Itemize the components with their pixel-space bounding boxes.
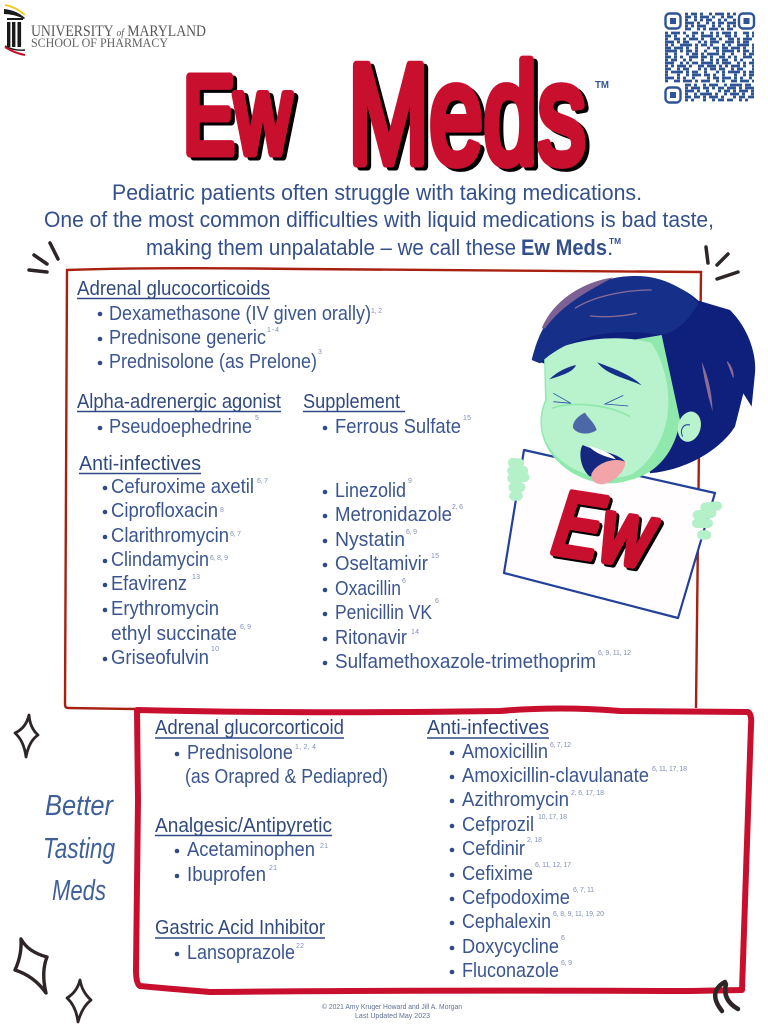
section: anti-infectives: 2, 18	[527, 837, 542, 844]
sign lettering: Ew: Ew	[550, 476, 666, 590]
QR code	[665, 14, 754, 102]
anti-infectives: left column: 6, 7	[257, 478, 268, 485]
section: adrenal glucorcorticoid: (as Orapred & Pediapred)	[185, 765, 388, 788]
icon: campus dome and columns	[4, 5, 25, 55]
anti-infectives: right column: Linezolid	[335, 479, 406, 502]
section: anti-infectives: Anti-infectives	[79, 452, 201, 475]
anti-infectives: left column: Ciprofloxacin	[111, 499, 218, 522]
section: anti-infectives: Azithromycin	[462, 788, 569, 811]
section: anti-infectives: Amoxicillin-clavulanate	[462, 764, 649, 787]
intro text	[44, 180, 714, 260]
section: adrenal glucocorticoids: Dexamethasone (IV given orally)	[109, 302, 371, 325]
section: anti-infectives	[79, 452, 631, 673]
anti-infectives: right column: 9	[408, 478, 412, 485]
anti-infectives: right column: Metronidazole	[335, 503, 452, 526]
section: gastric acid inhibitor: Lansoprazole	[187, 941, 295, 964]
label: Better Tasting Meds: Meds	[52, 875, 106, 907]
anti-infectives: left column: Cefuroxime axetil	[111, 475, 254, 498]
squeezed eyes	[553, 393, 628, 406]
icon: sparkle small	[67, 980, 91, 1022]
section: gastric acid inhibitor: Gastric Acid Inhibitor	[155, 916, 325, 939]
anti-infectives: left column	[103, 475, 268, 669]
section: gastric acid inhibitor	[155, 916, 325, 964]
icon: sparkle large	[15, 939, 47, 993]
section: adrenal glucorcorticoid: 1, 2, 4	[295, 744, 316, 751]
emphasis ticks: right	[706, 247, 738, 279]
anti-infectives: right column: 6	[435, 598, 439, 605]
anti-infectives: left column: 10	[211, 646, 219, 653]
section: anti-infectives: 6, 9	[561, 960, 572, 967]
mouth	[580, 445, 625, 477]
sign lettering: Ew: Ew	[547, 473, 664, 588]
section: analgesic/antipyretic: Acetaminophen	[187, 838, 315, 861]
sign card	[504, 450, 715, 618]
title lettering: Ew	[183, 54, 291, 177]
section: anti-infectives: Amoxicillin	[462, 740, 548, 763]
section: anti-infectives: 6, 8, 9, 11, 19, 20	[553, 911, 604, 918]
logo wordmark: UNIVERSITY of MARYLAND	[31, 23, 206, 40]
section: anti-infectives: 6	[561, 935, 565, 942]
label: Better Tasting Meds: Better	[45, 790, 114, 822]
eyebrows	[549, 365, 576, 379]
label: Better Tasting Meds: Tasting	[43, 833, 115, 865]
panel: Ew Meds list	[77, 277, 631, 673]
section: adrenal glucorcorticoid	[155, 716, 388, 788]
section: anti-infectives: Cefpodoxime	[462, 886, 570, 909]
section: supplement: 15	[463, 415, 471, 422]
anti-infectives: right column: 15	[431, 553, 439, 560]
title: Ew Meds	[183, 35, 609, 197]
anti-infectives: left column: Griseofulvin	[111, 646, 209, 669]
title shadow	[187, 38, 590, 197]
nose wrinkle	[552, 405, 630, 417]
anti-infectives: right column: 14	[411, 629, 419, 636]
section: alpha-adrenergic agonist: 5	[255, 415, 259, 422]
section: analgesic/antipyretic: 21	[320, 843, 328, 850]
section: adrenal glucocorticoids: 3	[318, 349, 322, 356]
intro text: Ew Meds	[521, 235, 607, 260]
anti-infectives: left column: Clarithromycin	[111, 524, 229, 547]
anti-infectives: right column: 2, 6	[452, 504, 463, 511]
panel: Better tasting list	[155, 716, 687, 982]
section: anti-infectives: Cephalexin	[462, 910, 551, 933]
intro text: making them unpalatable – we call these	[146, 235, 516, 260]
right hand	[697, 506, 717, 535]
panel: Better tasting frame	[136, 708, 751, 992]
footer credit: Last Updated May 2023	[355, 1013, 430, 1020]
face shadow	[540, 335, 680, 483]
teeth	[589, 446, 616, 459]
anti-infectives: right column: Ritonavir	[335, 626, 407, 649]
intro text: TM	[609, 237, 621, 246]
section: anti-infectives: Cefprozil	[462, 813, 534, 836]
title lettering: Meds	[348, 35, 586, 194]
left hand	[512, 463, 525, 496]
section: anti-infectives: Anti-infectives	[427, 716, 549, 739]
section: adrenal glucocorticoids: 1 - 4	[267, 327, 279, 334]
top hair	[532, 276, 698, 363]
logo subline: SCHOOL OF PHARMACY	[31, 35, 169, 50]
section: anti-infectives: Doxycycline	[462, 935, 559, 958]
section: supplement: Supplement	[303, 390, 400, 413]
anti-infectives: left column: 13	[192, 574, 200, 581]
intro text: Pediatric patients often struggle with taking medications.	[112, 180, 642, 205]
anti-infectives: left column: 8	[220, 507, 224, 514]
ear	[674, 409, 704, 444]
anti-infectives: left column: Erythromycin	[111, 597, 219, 620]
tongue	[591, 460, 625, 484]
section: analgesic/antipyretic: 21	[269, 865, 277, 872]
illustration: green-faced child holding Ew sign	[504, 276, 755, 618]
section: adrenal glucorcorticoid: Prednisolone	[187, 741, 293, 764]
title shadow: Meds	[352, 38, 590, 197]
title lettering	[183, 35, 586, 194]
face	[542, 338, 668, 478]
section: anti-infectives: Fluconazole	[462, 959, 559, 982]
anti-infectives: right column: 6, 9	[406, 529, 417, 536]
section: supplement: Ferrous Sulfate	[335, 415, 461, 438]
footer credit	[322, 1003, 462, 1020]
anti-infectives: right column: Sulfamethoxazole-trimethoprim	[335, 650, 596, 673]
anti-infectives: right column: 6, 9, 11, 12	[598, 650, 631, 657]
section: anti-infectives: 6, 7, 12	[550, 742, 571, 749]
section: analgesic/antipyretic: Analgesic/Antipyretic	[155, 814, 332, 837]
logo: University of Maryland School of Pharmacy	[4, 5, 206, 55]
panel: Ew Meds frame	[65, 268, 701, 709]
section: adrenal glucocorticoids: 1, 2	[371, 308, 382, 315]
anti-infectives: right column: Oseltamivir	[335, 552, 428, 575]
anti-infectives: right column	[323, 478, 631, 673]
anti-infectives: left column: ethyl succinate	[111, 622, 237, 645]
section: alpha-adrenergic agonist: Alpha-adrenergic agonist	[77, 390, 281, 413]
section: anti-infectives: 6, 11, 12, 17	[535, 862, 571, 869]
section: adrenal glucocorticoids: Prednisolone (as Prelone)	[109, 350, 317, 373]
section: adrenal glucorcorticoid: Adrenal glucorcorticoid	[155, 716, 344, 739]
section: anti-infectives	[427, 716, 687, 982]
section: gastric acid inhibitor: 22	[296, 943, 304, 950]
intro text: .	[607, 235, 613, 260]
trademark: TM	[595, 80, 609, 91]
section: alpha-adrenergic agonist	[77, 390, 281, 438]
anti-infectives: left column: 6, 7	[230, 531, 241, 538]
hair highlights	[542, 277, 613, 328]
intro text: One of the most common difficulties with liquid medications is bad taste,	[44, 207, 714, 232]
anti-infectives: right column: Nystatin	[335, 528, 405, 551]
title shadow: Ew	[187, 57, 295, 180]
section: anti-infectives: 10, 17, 18	[538, 814, 567, 821]
section: anti-infectives: Cefdinir	[462, 837, 525, 860]
section: anti-infectives: 2, 6, 17, 18	[571, 790, 604, 797]
anti-infectives: left column: 6, 9	[240, 624, 251, 631]
anti-infectives: right column: 6	[402, 578, 406, 585]
icon: corner marks	[715, 982, 738, 1011]
section: alpha-adrenergic agonist: Pseudoephedrine	[109, 415, 252, 438]
icon: sparkle top	[15, 715, 38, 757]
section: analgesic/antipyretic	[155, 814, 332, 886]
section: adrenal glucocorticoids	[77, 277, 382, 373]
section: analgesic/antipyretic: Ibuprofen	[187, 863, 266, 886]
section: adrenal glucocorticoids: Prednisone generic	[109, 326, 266, 349]
emphasis ticks: left	[29, 243, 58, 272]
section: anti-infectives: 6, 7, 11	[573, 887, 594, 894]
footer credit: © 2021 Amy Kruger Howard and Jill A. Morgan	[322, 1003, 462, 1011]
anti-infectives: left column: Clindamycin	[111, 548, 209, 571]
section: anti-infectives: 6, 11, 17, 18	[652, 766, 687, 773]
head artwork	[512, 276, 755, 535]
anti-infectives: right column: Penicillin VK	[335, 601, 432, 624]
section: supplement	[303, 390, 471, 438]
section: adrenal glucocorticoids: Adrenal glucocorticoids	[77, 277, 270, 300]
back hair	[533, 277, 755, 473]
anti-infectives: left column: 6, 8, 9	[210, 555, 228, 562]
anti-infectives: right column: Oxacillin	[335, 577, 401, 600]
nose	[573, 413, 597, 434]
label: Better Tasting Meds	[43, 790, 115, 907]
section: anti-infectives: Cefixime	[462, 862, 533, 885]
anti-infectives: left column: Efavirenz	[111, 572, 187, 595]
